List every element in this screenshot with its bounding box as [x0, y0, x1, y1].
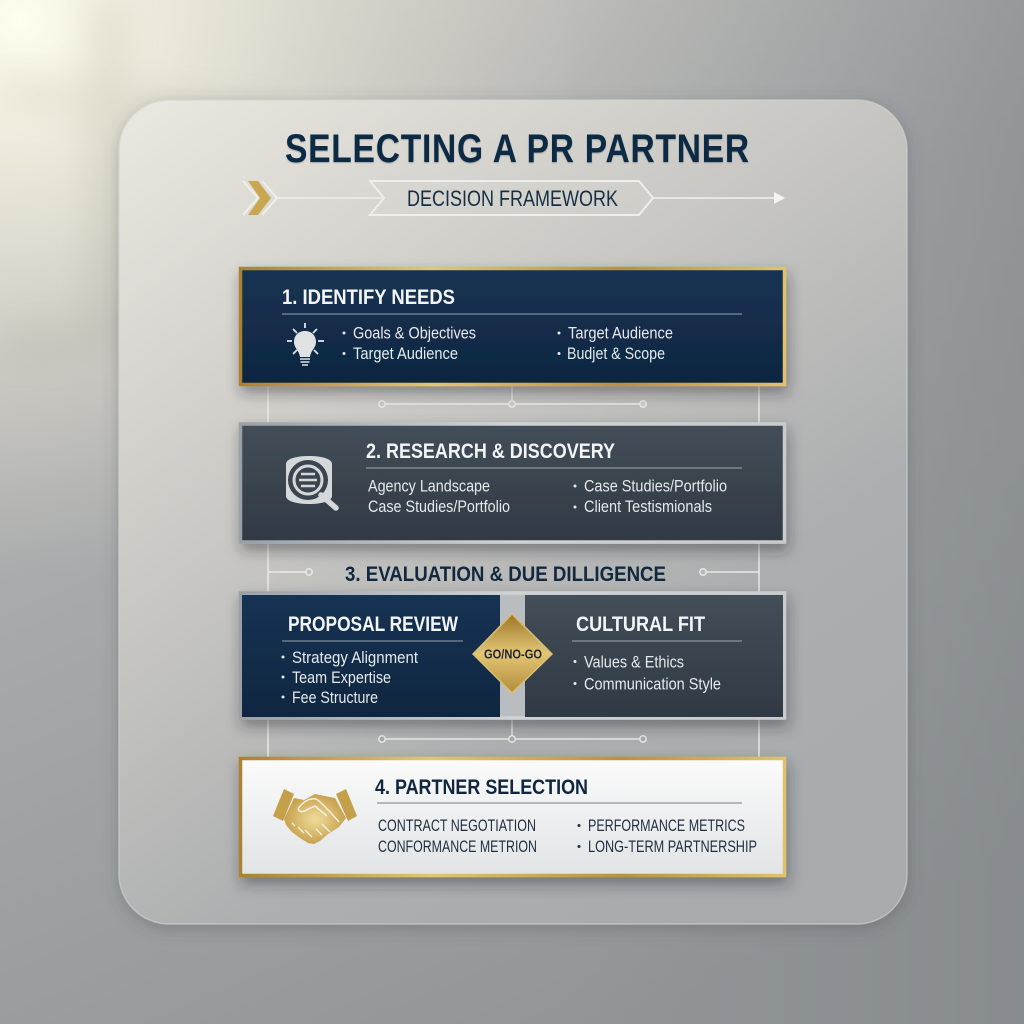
title: SELECTING A PR PARTNER	[285, 126, 749, 171]
list: research right	[574, 476, 727, 516]
subtitle arrow banner: decision framework: DECISION FRAMEWORK	[407, 186, 618, 211]
list: selection right: LONG-TERM PARTNERSHIP	[588, 837, 757, 856]
list: needs left	[342, 324, 476, 363]
icon: database with magnifier	[286, 456, 336, 508]
decision diamond: go/no-go	[473, 614, 552, 693]
list: research left: Agency Landscape	[368, 476, 490, 496]
panel: cultural fit: Communication Style	[584, 674, 721, 694]
list: selection right: PERFORMANCE METRICS	[588, 816, 745, 835]
card 1: identify needs: 1. IDENTIFY NEEDS	[282, 285, 455, 309]
panel: cultural fit	[525, 595, 783, 717]
card 2: research and discovery: 2. RESEARCH & DISCOVERY	[366, 439, 615, 463]
list: needs right: Budjet & Scope	[567, 344, 665, 363]
panel: proposal review	[242, 595, 500, 717]
list: selection left: CONTRACT NEGOTIATION	[378, 816, 536, 835]
card 3: evaluation split	[240, 593, 784, 718]
decision diamond: go/no-go: GO/NO-GO	[484, 648, 542, 662]
list: selection right	[578, 816, 757, 856]
panel: cultural fit: Values & Ethics	[584, 652, 684, 672]
card 1: identify needs	[240, 268, 784, 384]
panel: proposal review: Team Expertise	[292, 668, 391, 687]
list: research right: Case Studies/Portfolio	[584, 476, 727, 496]
panel: proposal review: PROPOSAL REVIEW	[288, 612, 459, 636]
list: selection left	[378, 816, 537, 856]
list: needs left: Target Audience	[353, 344, 458, 363]
subtitle arrow banner: decision framework	[243, 181, 785, 215]
card 4: partner selection: 4. PARTNER SELECTION	[375, 775, 588, 799]
icon: light bulb	[287, 323, 324, 365]
panel: proposal review: Strategy Alignment	[292, 648, 418, 667]
main panel	[119, 100, 907, 924]
panel: proposal review: Fee Structure	[292, 688, 378, 707]
list: needs right: Target Audience	[568, 324, 673, 342]
connector rails	[268, 385, 759, 757]
list: research left: Case Studies/Portfolio	[368, 497, 510, 516]
heading: evaluation: 3. EVALUATION & DUE DILLIGENCE	[345, 562, 666, 586]
card 2: research and discovery	[240, 424, 784, 542]
icon: gold chevron	[243, 181, 277, 215]
icon: handshake	[273, 789, 357, 844]
card 4: partner selection	[240, 758, 784, 876]
list: selection left: CONFORMANCE METRION	[378, 837, 537, 856]
list: needs right	[558, 324, 673, 363]
list: needs left: Goals & Objectives	[353, 324, 476, 342]
list: research right: Client Testismionals	[584, 497, 712, 516]
panel: cultural fit: CULTURAL FIT	[576, 612, 705, 636]
list: research left	[368, 476, 510, 516]
